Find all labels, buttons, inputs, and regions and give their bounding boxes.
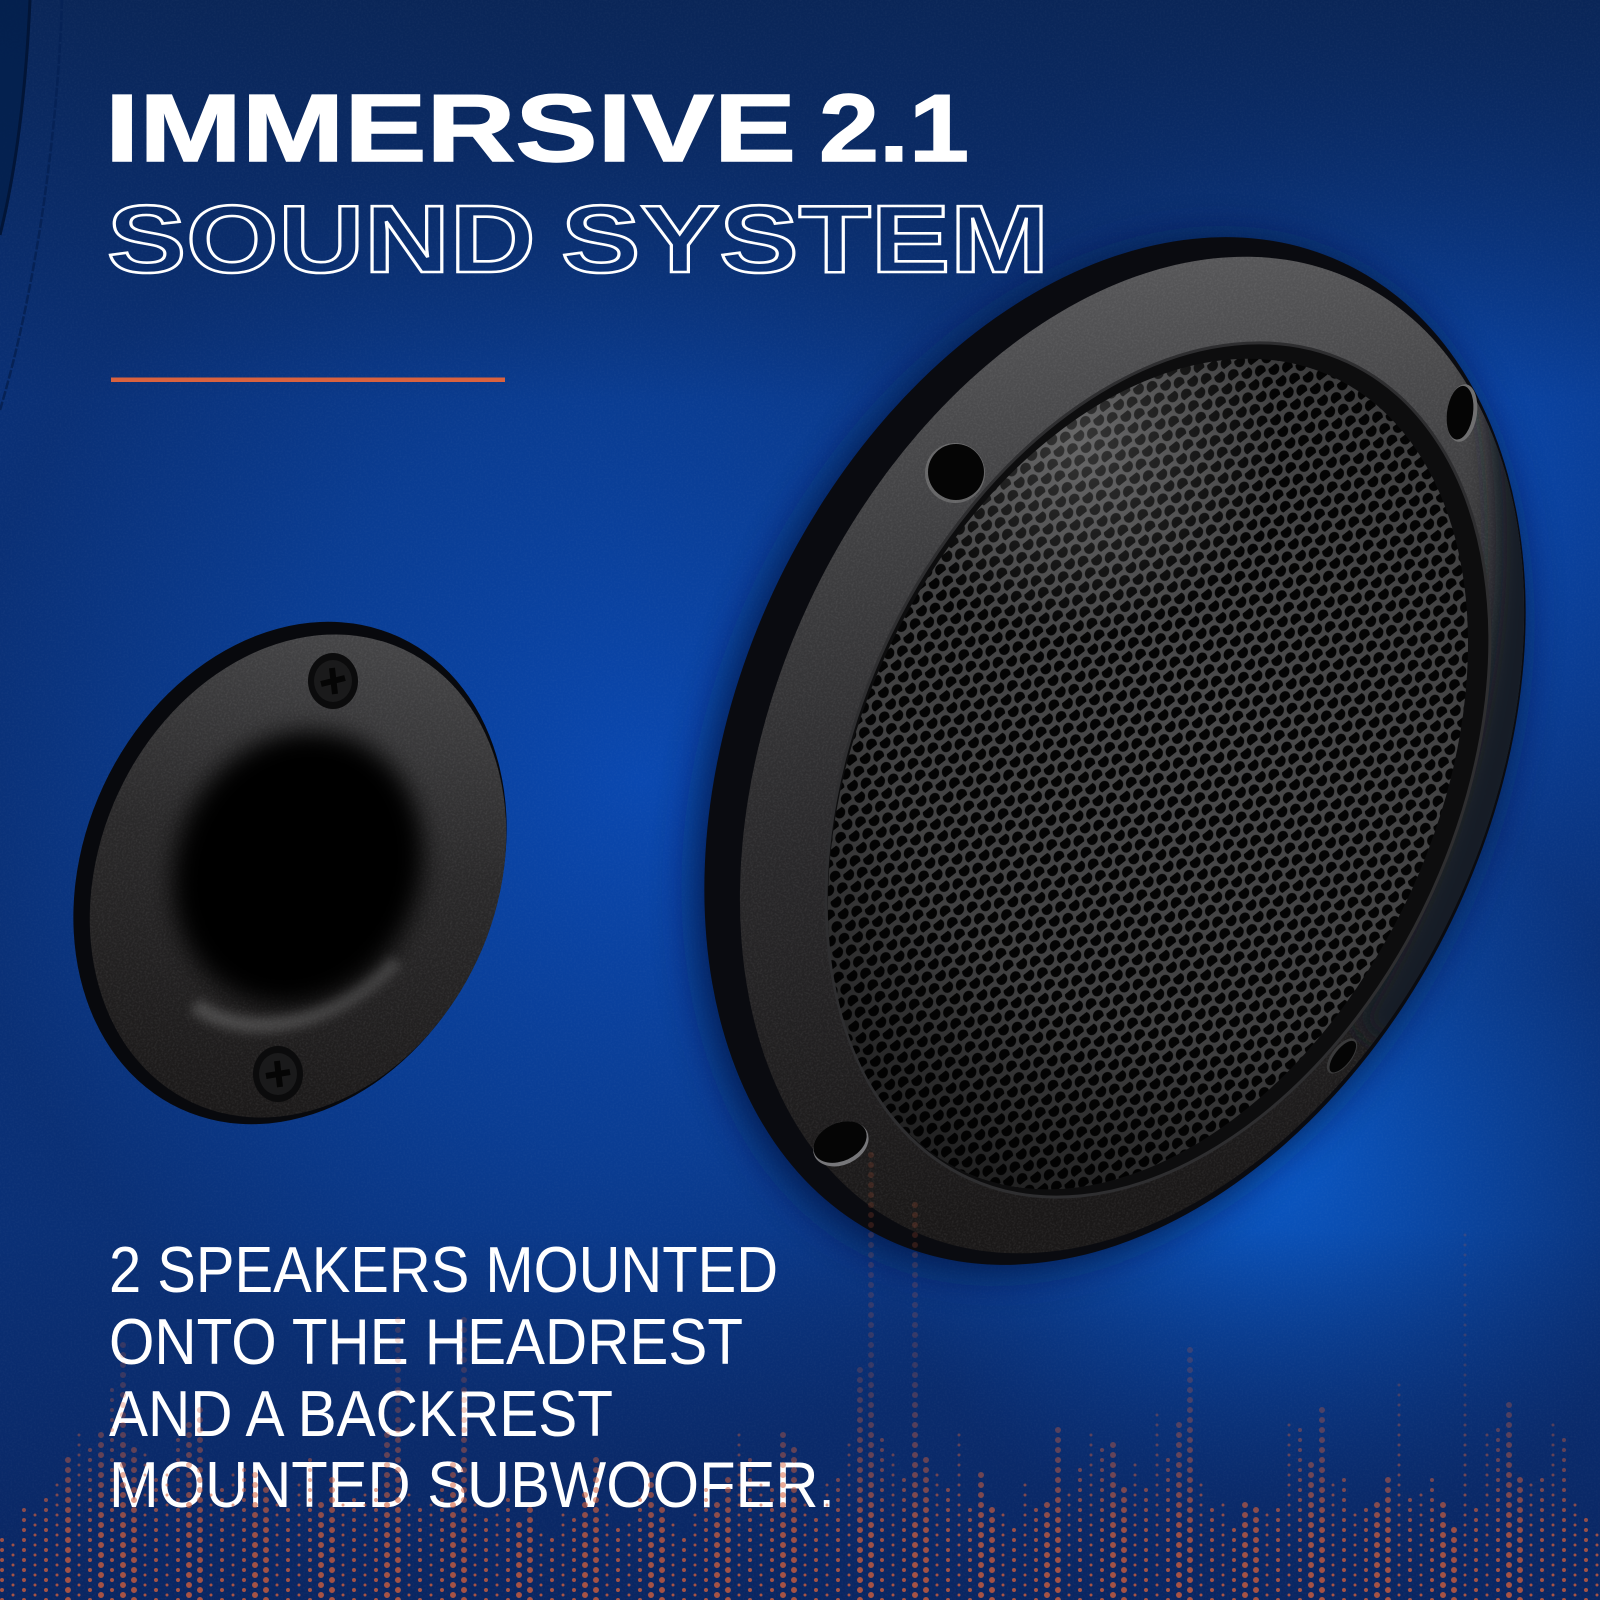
mounting hole: upper right <box>1443 382 1481 444</box>
perforated grille <box>702 255 1594 1293</box>
line 1: 2 SPEAKERS MOUNTED <box>109 1233 778 1306</box>
title <box>105 75 1049 293</box>
top screw <box>308 653 358 709</box>
line 3: AND A BACKREST <box>109 1377 613 1450</box>
orange divider rule <box>111 378 505 382</box>
mounting hole: lower right <box>1321 1033 1363 1079</box>
speaker ring face <box>587 129 1600 1381</box>
title line 2: outlined: SOUND SYSTEM <box>107 186 1049 293</box>
speaker side edge <box>546 103 1600 1399</box>
title line 1: word two: 2.1 <box>819 75 969 182</box>
body text <box>109 1233 835 1521</box>
flange texture <box>13 566 583 1186</box>
speaker cast shadow <box>533 103 1600 1409</box>
mounting hole: upper left <box>925 443 985 503</box>
title line 1: word one: IMMERSIVE <box>105 75 796 182</box>
port shadow and side edge <box>0 550 587 1196</box>
line 2: ONTO THE HEADREST <box>109 1305 743 1378</box>
line 4: MOUNTED SUBWOOFER. <box>109 1448 835 1521</box>
main speaker <box>668 222 1546 1296</box>
port highlight crescent <box>195 960 395 1025</box>
grille shading <box>702 255 1594 1293</box>
ring right edge shade <box>1380 300 1526 1040</box>
leather seam, top left <box>0 0 62 410</box>
subwoofer port <box>73 622 507 1124</box>
grille highlight <box>702 255 1594 1293</box>
orange equalizer dot columns <box>2 1150 1597 1600</box>
inner lip <box>696 235 1600 1305</box>
bottom screw <box>253 1046 303 1102</box>
ring texture <box>587 129 1600 1381</box>
port opening <box>128 690 468 1046</box>
port flange <box>13 566 583 1186</box>
mounting hole: lower left <box>806 1113 876 1175</box>
